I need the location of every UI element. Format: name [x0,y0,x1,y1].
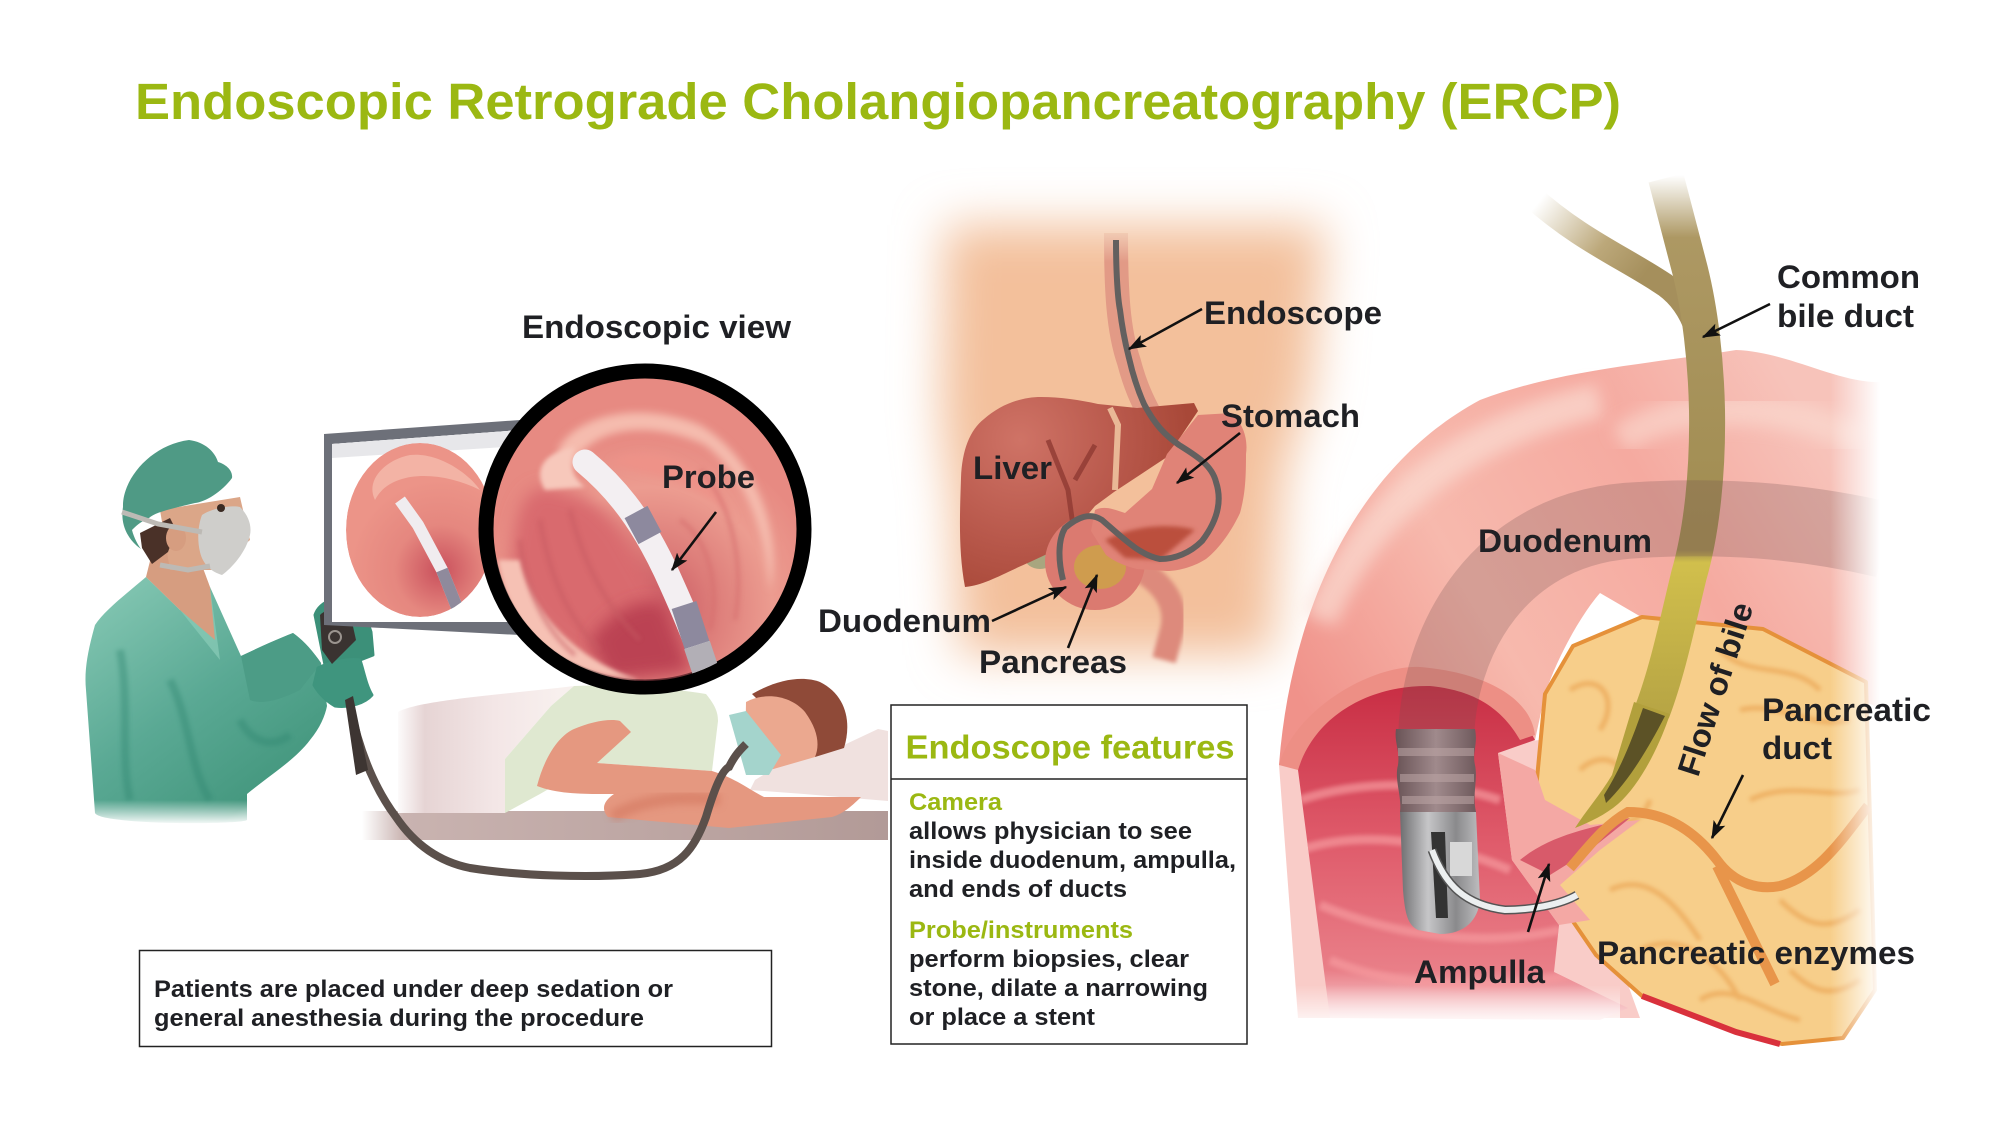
face [160,497,250,570]
lower edge fade [1270,985,1620,1031]
duct lower tube [1575,702,1670,828]
pancreas [1074,545,1126,589]
sedation note line 1: Patients are placed under deep sedation or [154,976,673,1003]
right edge fade [1830,340,1880,1060]
label: common bile duct: Common [1777,259,1920,295]
duct opening [1604,708,1665,803]
label: duodenum small view: Duodenum [818,603,991,639]
panel: ampulla and ducts detail [1279,178,1877,1047]
probe in lens [585,462,712,690]
icon: endoscope cable [350,706,746,876]
label: common bile duct line 2: bile duct [1777,298,1914,334]
upper glove [315,600,373,665]
surgical mask [198,506,251,575]
ampulla [1520,818,1630,875]
small intestine [1140,570,1173,660]
label: pancreatic duct: Pancreatic [1762,692,1931,728]
lens folds [510,487,700,676]
esophagus [1116,233,1150,415]
duodenum arch [1279,350,1885,765]
duodenum rim [1279,667,1535,770]
camera line 1: allows physician to see [909,818,1192,845]
panel: physician [85,440,373,826]
arrow: ampulla [1528,864,1549,932]
gown [85,577,327,823]
panel: monitor [324,420,520,635]
arrow: pancreatic duct [1712,775,1743,838]
arrow: probe [672,512,716,570]
label: stomach: Stomach [1221,398,1360,434]
surgical cap [122,440,232,549]
camera heading: Camera [909,789,1002,816]
features heading: Endoscope features [906,728,1234,766]
probe line 2: stone, dilate a narrowing [909,975,1208,1002]
arrow: duodenum small view [992,587,1066,621]
patient arm [537,720,861,828]
label: pancreatic enzymes: Pancreatic enzymes [1597,935,1915,971]
hair [140,518,176,564]
pink wall near ampulla [1498,753,1640,925]
endoscope tip [1396,729,1577,934]
label: liver: Liver [973,450,1052,486]
arrow: common bile duct [1703,304,1770,337]
blanket [398,686,574,813]
bed [362,811,888,840]
callout: sedation note [140,950,772,1046]
patient gown [505,685,718,813]
panel: abdominal anatomy [942,225,1325,660]
oxygen mask [729,711,781,775]
title: Endoscopic Retrograde Cholangiopancreatography (ERCP) [135,73,1621,130]
arrow: pancreas [1068,575,1097,648]
sedation note line 2: general anesthesia during the procedure [154,1005,644,1032]
duodenum ring [1045,514,1145,610]
arrow: endoscope [1129,309,1202,349]
gallbladder [1025,547,1055,569]
label: pancreatic duct line 2: duct [1762,730,1832,766]
label: flow of bile: Flow of bile [1670,598,1760,780]
camera line 2: inside duodenum, ampulla, [909,847,1236,874]
patient face [745,696,818,770]
panel: patient on bed [362,679,888,840]
duct branch [1530,195,1697,330]
torso background [942,225,1325,655]
stomach [1091,413,1246,571]
panel: endoscopic view lens [486,371,804,690]
label: pancreas: Pancreas [979,644,1127,680]
pillow [750,729,888,801]
arrow: stomach [1177,433,1240,483]
label: probe: Probe [662,459,755,495]
lower glove [314,659,372,706]
label: endoscopic view: Endoscopic view [522,309,791,345]
camera line 3: and ends of ducts [909,876,1127,903]
pancreas tissue [1535,617,1875,1044]
label: ampulla: Ampulla [1414,954,1545,990]
pancreatic duct [1570,806,1868,984]
endoscope inside body [1059,240,1219,580]
label: endoscope: Endoscope [1204,295,1382,331]
panel: endoscope features [891,705,1247,1044]
endoscope handle [320,610,356,664]
label: duodenum: Duodenum [1478,523,1652,559]
probe heading: Probe/instruments [909,917,1133,944]
common bile duct [1652,178,1707,712]
monitor endoscopic image [346,443,494,620]
translucent endoscope path [1436,518,1885,745]
patient hair [752,679,847,757]
liver [960,397,1198,587]
duodenum interior [1279,740,1640,1018]
neck [146,545,215,640]
infographic canvas [86,82,1930,1048]
probe line 1: perform biopsies, clear [909,946,1189,973]
probe line 3: or place a stent [909,1004,1095,1031]
